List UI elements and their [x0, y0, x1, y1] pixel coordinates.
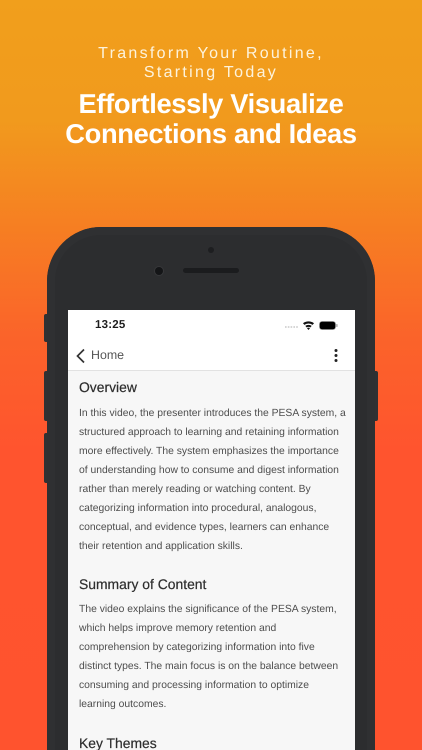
back label: Home	[91, 348, 124, 362]
subtitle: Starting Today	[144, 64, 278, 80]
overview text: rather than merely reading or watching content. By	[79, 484, 311, 494]
summary text: distinct types. The main focus is on the balance between	[79, 661, 338, 672]
overview text: of understanding how to consume and digest information	[79, 464, 339, 476]
title: Effortlessly Visualize	[79, 88, 343, 119]
status icons	[285, 321, 338, 330]
summary text: comprehension by categorizing information into five	[79, 642, 315, 653]
overview text: categorizing information into procedural, analogous,	[79, 502, 316, 514]
overview text: In this video, the presenter introduces the PESA system, a	[79, 408, 346, 418]
app screen	[68, 310, 355, 750]
summary text	[79, 604, 338, 710]
overview text	[79, 408, 346, 552]
back chevron	[76, 348, 84, 364]
summary text: The video explains the significance of the PESA system,	[79, 604, 337, 615]
summary text: learning outcomes.	[79, 699, 166, 710]
summary text: which helps improve memory retention and	[79, 623, 276, 634]
overview text: conceptual, and evidence types, learners can enhance	[79, 522, 329, 532]
title	[65, 88, 357, 149]
subtitle	[98, 45, 324, 80]
time: 13:25	[95, 319, 125, 331]
phone mockup	[44, 227, 378, 750]
summary text: consuming and processing information to optimize	[79, 680, 309, 691]
heading block	[65, 45, 357, 149]
side buttons	[44, 314, 48, 342]
overview text: their retention and application skills.	[79, 540, 243, 552]
overview text: more effectively. The system emphasizes the importance	[79, 446, 339, 456]
phone body	[47, 227, 375, 750]
status and navigation bar	[68, 310, 355, 371]
subtitle: Transform Your Routine,	[98, 45, 324, 62]
camera	[155, 267, 163, 275]
overview text: structured approach to learning and retaining information	[79, 426, 339, 438]
overview heading: Overview	[79, 379, 137, 395]
summary heading: Summary of Content	[79, 576, 206, 592]
more menu	[334, 349, 338, 362]
front sensor	[208, 247, 214, 253]
speaker	[183, 268, 239, 273]
title: Connections and Ideas	[65, 118, 357, 149]
